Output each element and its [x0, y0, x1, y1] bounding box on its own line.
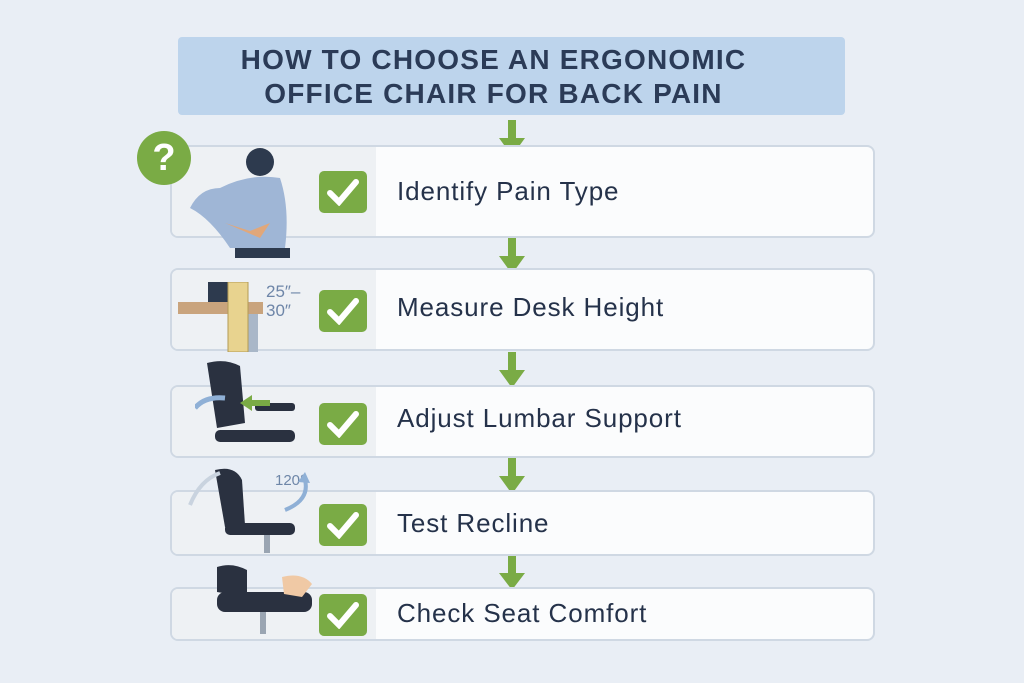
title: HOW TO CHOOSE AN ERGONOMIC	[241, 44, 746, 75]
text 2: Measure Desk Height	[397, 292, 664, 322]
arrow 1	[499, 120, 525, 145]
illustration: man with back pain	[190, 148, 290, 258]
checkbox 5	[319, 594, 367, 636]
illustration: desk and ruler	[178, 282, 301, 352]
illustration: seat cushion with hand	[217, 565, 312, 634]
illustration: reclining chair	[188, 468, 310, 553]
icon: question mark: ?	[152, 137, 176, 179]
checkbox 2	[319, 290, 367, 332]
arrow 5	[499, 556, 525, 587]
step 2: measure desk height	[170, 268, 875, 351]
step 5: check seat comfort	[170, 587, 875, 641]
text 1: Identify Pain Type	[397, 176, 619, 206]
step 1: identify pain type	[170, 145, 875, 238]
illustration: desk and ruler: 30″	[266, 301, 291, 320]
text 5: Check Seat Comfort	[397, 598, 647, 628]
arrow 3	[499, 352, 525, 385]
title	[178, 37, 845, 115]
arrow 2	[499, 238, 525, 268]
illustration: chair with lumbar arrow	[195, 361, 295, 442]
step 4: test recline	[170, 490, 875, 556]
illustration: desk and ruler: 25″–	[266, 282, 301, 301]
text 3: Adjust Lumbar Support	[397, 403, 682, 433]
checkbox 1	[319, 171, 367, 213]
illustration: reclining chair: 120°	[275, 472, 306, 489]
checkbox 4	[319, 504, 367, 546]
checkbox 3	[319, 403, 367, 445]
text 4: Test Recline	[397, 508, 549, 538]
title: OFFICE CHAIR FOR BACK PAIN	[264, 78, 723, 109]
step 3: adjust lumbar support	[170, 385, 875, 458]
icon: question mark	[137, 131, 191, 185]
arrow 4	[499, 458, 525, 490]
